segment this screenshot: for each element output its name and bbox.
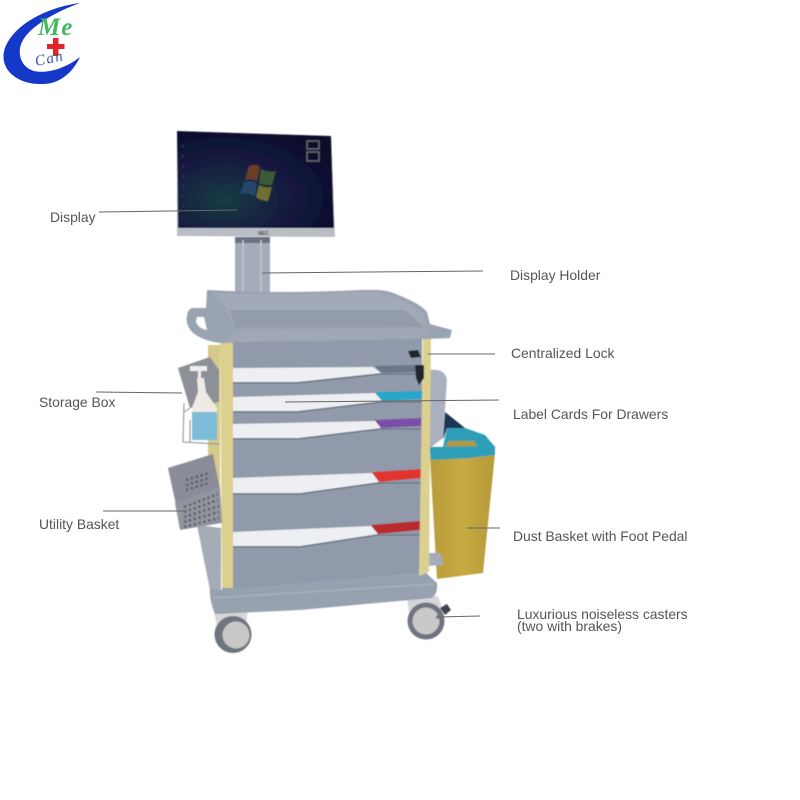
central lock bbox=[408, 350, 424, 385]
back left column bbox=[208, 345, 220, 500]
tray with handles bbox=[187, 290, 452, 343]
dust basket bbox=[430, 453, 495, 579]
desktop icons bbox=[307, 141, 319, 161]
cart lower side bbox=[197, 525, 221, 590]
tray floor bbox=[230, 310, 424, 327]
utility basket bbox=[168, 454, 222, 530]
illustration: medical cart bbox=[168, 131, 495, 653]
label: Storage Box: Storage Box bbox=[39, 394, 116, 410]
label: Luxurious noiseless casters: Luxurious noiseless casters bbox=[517, 606, 688, 622]
logo: blue crescent bbox=[3, 3, 80, 84]
foot pedal bbox=[426, 553, 444, 566]
sanitizer bottle bbox=[190, 366, 217, 440]
brand mark: NEC bbox=[258, 231, 269, 237]
windows logo bbox=[240, 165, 276, 201]
dust basket opening bbox=[443, 412, 465, 440]
display holder bbox=[235, 237, 270, 293]
storage box bbox=[178, 357, 219, 408]
logo: Can wordmark: Can bbox=[34, 48, 66, 70]
label: Luxurious noiseless casters bbox=[438, 606, 688, 634]
label: Display Holder: Display Holder bbox=[510, 267, 601, 283]
logo: red cross bbox=[47, 38, 64, 56]
dust basket lid bbox=[429, 446, 495, 460]
drawer dividers bbox=[233, 374, 421, 547]
drawer colour tabs bbox=[371, 365, 423, 534]
label: Label Cards For Drawers: Label Cards For Drawers bbox=[513, 406, 668, 422]
caster housings bbox=[214, 610, 248, 630]
monitor screen bbox=[177, 131, 334, 228]
label: Dust Basket with Foot Pedal: Dust Basket with Foot Pedal bbox=[513, 528, 688, 544]
label: Display: Display bbox=[50, 209, 96, 225]
label: Luxurious noiseless casters: (two with brakes) bbox=[517, 618, 622, 634]
monitor bezel bbox=[177, 131, 335, 237]
cart base bbox=[210, 572, 437, 614]
yellow side columns bbox=[220, 338, 431, 588]
left caster bbox=[214, 616, 252, 653]
tray inner wall bbox=[212, 292, 427, 326]
logo: Me wordmark: Me bbox=[37, 14, 73, 41]
logo bbox=[3, 3, 80, 84]
cart body bbox=[222, 338, 422, 592]
tray rim bbox=[223, 327, 427, 342]
drawer label cards bbox=[233, 367, 382, 546]
handle gap bbox=[196, 317, 207, 330]
label: Centralized Lock: Centralized Lock bbox=[511, 345, 615, 361]
label: Utility Basket: Utility Basket bbox=[39, 516, 119, 532]
right caster bbox=[408, 602, 451, 640]
wire rack bbox=[183, 403, 219, 444]
desktop icon column bbox=[182, 145, 184, 215]
dust basket back panel bbox=[430, 370, 447, 448]
